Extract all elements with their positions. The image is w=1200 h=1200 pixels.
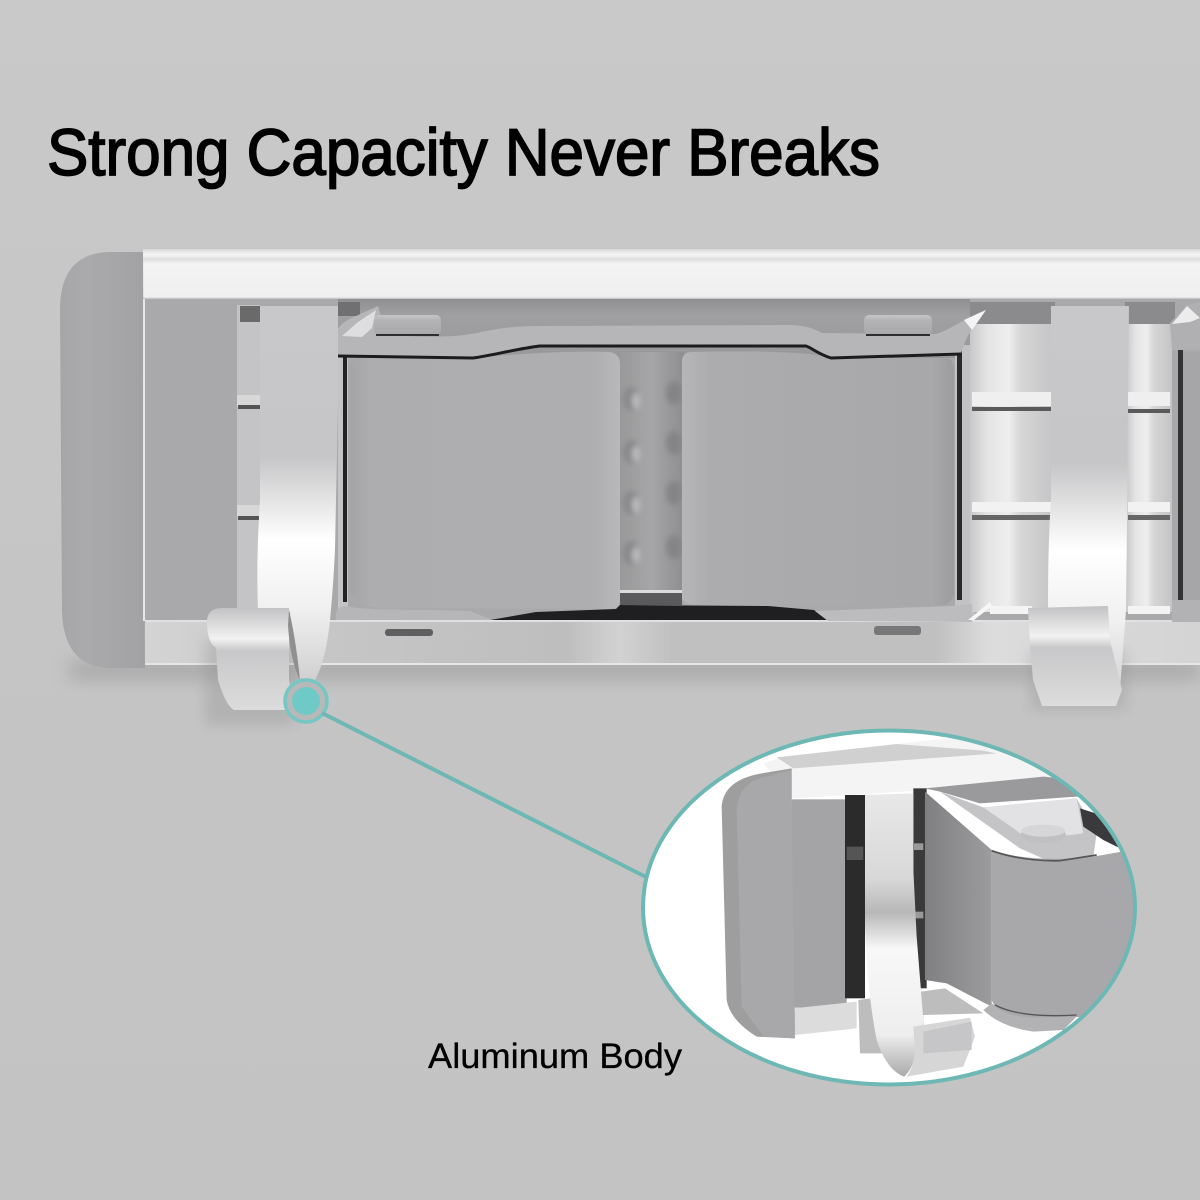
lower bolt left — [385, 629, 433, 636]
zoomed top rail — [764, 738, 1052, 798]
zoomed band under roller — [983, 1003, 1080, 1032]
label: aluminum body: Aluminum Body — [428, 1037, 683, 1076]
zoomed detail — [722, 737, 1150, 1077]
bolt left — [374, 315, 441, 336]
zoomed back panels — [792, 799, 847, 1008]
band highlights — [342, 310, 376, 337]
title: Strong Capacity Never Breaks — [47, 115, 880, 189]
zoomed slanted clip side — [925, 792, 992, 1007]
drop shadow under rail — [70, 662, 1200, 678]
hook foot — [207, 608, 293, 710]
end cap — [60, 252, 145, 668]
bottom band — [336, 606, 492, 620]
zoomed hook foot — [907, 1018, 975, 1077]
roller shadow edges — [343, 352, 347, 602]
mop clip: roller two edge — [1170, 302, 1200, 622]
infographic canvas — [48, 126, 1200, 1086]
top rail — [143, 249, 1200, 299]
lower bolt right — [874, 626, 921, 635]
lens outline — [643, 730, 1135, 1084]
callout marker — [285, 680, 327, 722]
right roller — [682, 351, 954, 606]
zoomed clip plate — [940, 792, 1097, 862]
first hook — [205, 306, 338, 725]
zoomed bolt — [1021, 824, 1066, 840]
zoomed hook — [865, 793, 923, 1077]
panel: back channel — [143, 296, 1200, 626]
zoomed end cap — [722, 768, 795, 1038]
mop clip: roller one — [334, 306, 992, 636]
panel: shadowed channel behind clip — [338, 298, 970, 358]
callout lens — [643, 730, 1150, 1084]
left roller — [349, 352, 620, 609]
callout connector — [322, 713, 646, 877]
top band — [334, 306, 986, 357]
zoomed roller — [992, 850, 1133, 1017]
zoomed bottom rail piece — [793, 1002, 857, 1035]
hook strip — [1048, 306, 1129, 700]
hook strip — [257, 306, 338, 683]
black gap under rollers — [490, 605, 827, 620]
hook foot — [1028, 606, 1122, 706]
aluminum body — [237, 302, 1175, 620]
bottom rail — [145, 620, 1200, 665]
center textured block — [618, 352, 684, 605]
mop holder product — [60, 249, 1200, 725]
bolt right — [864, 315, 932, 336]
second hook — [1028, 306, 1129, 710]
zoomed dark hardware — [1080, 808, 1118, 848]
zoomed bottom plate — [858, 988, 983, 1053]
